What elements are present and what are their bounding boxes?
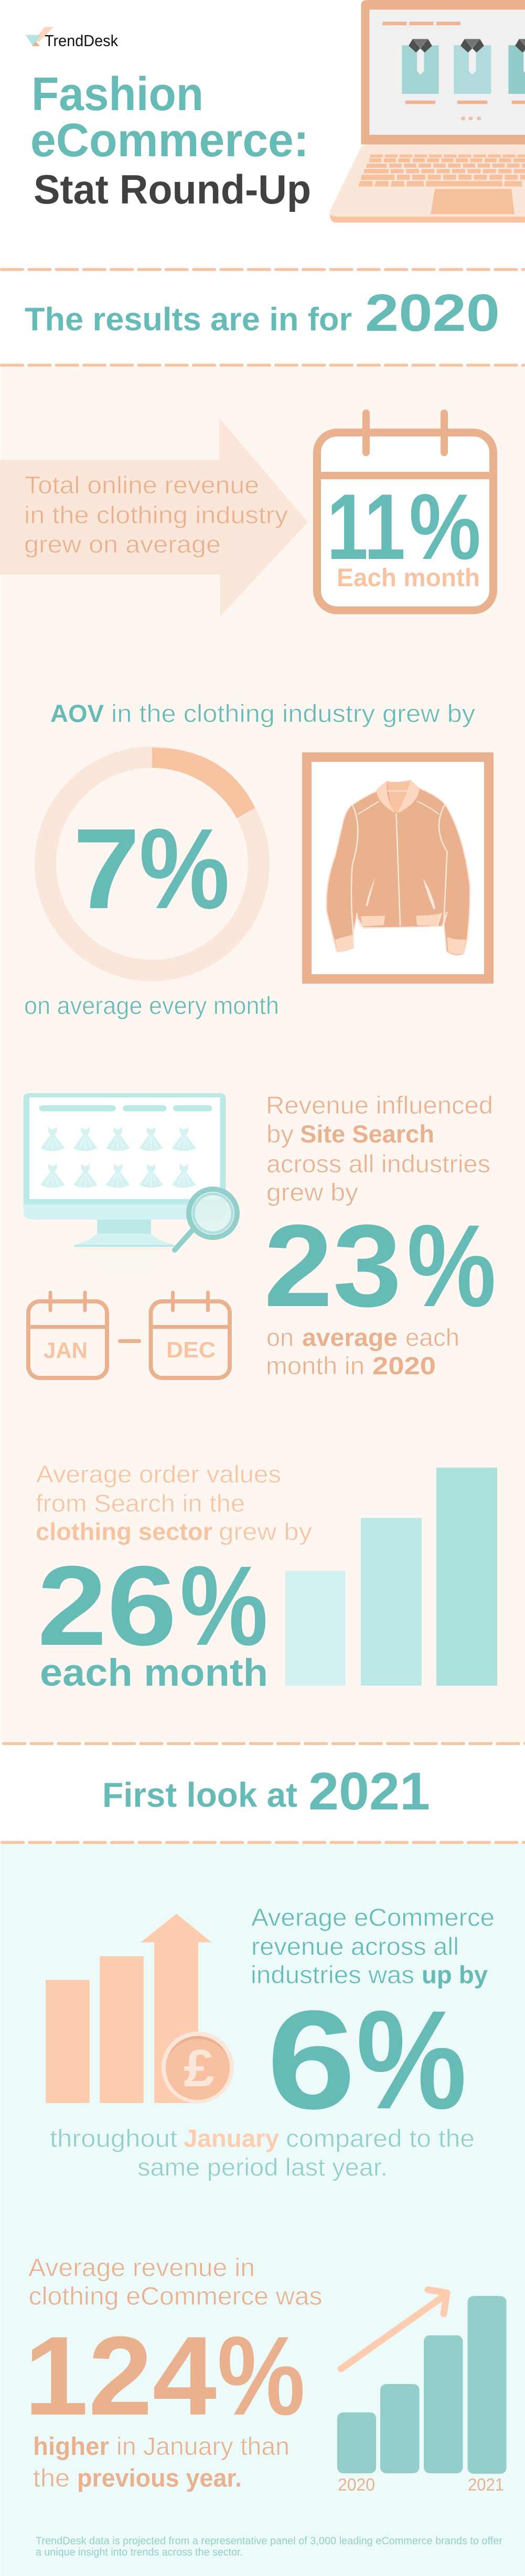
calendar: December bbox=[149, 1292, 232, 1378]
divider bbox=[1, 364, 525, 367]
caption: compared to the bbox=[286, 2125, 475, 2152]
caption: previous year. bbox=[77, 2464, 242, 2493]
stat number bbox=[264, 1201, 496, 1331]
caption: 2020 bbox=[372, 1352, 436, 1379]
caption: on average every month bbox=[24, 991, 279, 1019]
heading: results for 2020: 2020 bbox=[365, 284, 500, 342]
text block: clothing eCommerce was bbox=[28, 2283, 322, 2310]
stat number: % bbox=[139, 805, 230, 933]
axis label: 2020: 2020 bbox=[338, 2475, 375, 2494]
panel: 2020 results background bbox=[1, 366, 525, 1743]
dash between calendars bbox=[118, 1339, 141, 1343]
caption: average bbox=[302, 1323, 398, 1351]
text block: up by bbox=[422, 1961, 488, 1988]
stat number: % bbox=[409, 475, 481, 579]
text block: Total online revenue bbox=[25, 471, 259, 499]
heading: results for 2020 bbox=[25, 284, 500, 342]
text block: Average order values bbox=[36, 1461, 281, 1488]
panel: site search stat bbox=[24, 1091, 496, 1379]
panel: online revenue stat bbox=[0, 413, 497, 617]
logo wordmark: TrendDesk bbox=[45, 31, 118, 50]
title bbox=[30, 68, 311, 212]
stat number bbox=[73, 805, 230, 933]
icon: calendar with 11% bbox=[313, 413, 497, 610]
text block bbox=[251, 1903, 495, 1988]
heading: first look at 2021: First look at bbox=[102, 1775, 297, 1814]
title: eCommerce: bbox=[30, 114, 309, 167]
heading: AOV bbox=[50, 699, 104, 727]
text block: grew on average bbox=[24, 531, 221, 558]
caption: the bbox=[33, 2464, 70, 2493]
bar chart: 2020 to 2021 bbox=[337, 2290, 507, 2494]
text block: from Search in the bbox=[36, 1490, 245, 1517]
stat number: % bbox=[180, 1542, 268, 1669]
stat number: 6 bbox=[267, 1981, 356, 2138]
logo mark bbox=[26, 27, 53, 46]
stat number: 23 bbox=[264, 1201, 402, 1331]
caption: each bbox=[405, 1323, 459, 1351]
text block bbox=[28, 2254, 322, 2310]
title: Fashion bbox=[31, 68, 203, 121]
stat caption: each month bbox=[40, 1652, 268, 1694]
divider bbox=[3, 1742, 525, 1745]
arrow bbox=[341, 2290, 447, 2369]
heading: first look at 2021 bbox=[102, 1762, 430, 1821]
stat number bbox=[24, 2313, 305, 2439]
text block: Average revenue in bbox=[28, 2254, 255, 2282]
icon: monitor with dresses and magnifier bbox=[24, 1093, 237, 1290]
arrow bbox=[0, 418, 308, 617]
logo bbox=[26, 27, 118, 50]
heading: results for 2020: The results are in for bbox=[25, 301, 352, 338]
bar chart bbox=[285, 1468, 497, 1686]
text block: Site Search bbox=[300, 1120, 434, 1148]
caption: January bbox=[184, 2125, 279, 2152]
stat number: 124 bbox=[24, 2313, 217, 2439]
icon: framed jacket bbox=[307, 757, 489, 979]
text block: revenue across all bbox=[251, 1933, 459, 1960]
text block: Average eCommerce bbox=[251, 1903, 495, 1931]
text block bbox=[24, 471, 288, 558]
caption: higher bbox=[33, 2433, 109, 2461]
panel: AOV stat bbox=[24, 699, 489, 1019]
stat number: % bbox=[217, 2313, 305, 2439]
text block: grew by bbox=[219, 1518, 312, 1545]
caption: in January than bbox=[116, 2433, 290, 2461]
stat number: % bbox=[407, 1201, 496, 1331]
text block: grew by bbox=[266, 1178, 359, 1206]
stat number bbox=[37, 1542, 268, 1669]
calendar: January bbox=[26, 1292, 109, 1378]
stat number: % bbox=[356, 1981, 467, 2138]
divider bbox=[2, 1841, 525, 1844]
title: Stat Round-Up bbox=[34, 166, 311, 212]
icon: bars with arrow and pound coin bbox=[46, 1914, 234, 2104]
heading: first look at 2021: 2021 bbox=[308, 1762, 430, 1821]
icon: Jan to Dec calendars bbox=[26, 1292, 232, 1378]
icon: pound coin: £ bbox=[184, 2039, 215, 2098]
text block bbox=[36, 1461, 312, 1545]
panel: eCommerce revenue stat bbox=[46, 1903, 495, 2181]
stat number bbox=[327, 475, 481, 579]
text block: clothing sector bbox=[36, 1518, 212, 1545]
caption bbox=[33, 2433, 290, 2493]
panel: 2021 background bbox=[1, 1844, 525, 2576]
stat number: 11 bbox=[327, 475, 405, 579]
panel: clothing revenue stat bbox=[24, 2254, 507, 2494]
panel: search order value stat bbox=[36, 1461, 497, 1694]
text block: across all industries bbox=[266, 1150, 490, 1178]
stat number bbox=[267, 1981, 467, 2138]
caption: month in bbox=[266, 1352, 365, 1379]
calendar: December: DEC bbox=[166, 1338, 216, 1363]
text block bbox=[266, 1091, 493, 1206]
footnote: a unique insight into trends across the sector. bbox=[36, 2547, 243, 2558]
caption: on bbox=[266, 1323, 294, 1351]
stat caption: Each month bbox=[337, 564, 480, 592]
stat number: 7 bbox=[73, 805, 140, 933]
caption: throughout bbox=[50, 2125, 177, 2152]
icon: laptop with shirt shop bbox=[330, 0, 525, 223]
panel: 2020 heading band bbox=[1, 270, 525, 342]
axis label: 2021: 2021 bbox=[468, 2475, 504, 2494]
calendar: January: JAN bbox=[44, 1338, 88, 1363]
divider bbox=[1, 268, 525, 271]
panel: header bbox=[26, 0, 525, 223]
text block: industries was bbox=[251, 1961, 414, 1988]
icon: pound coin bbox=[162, 2031, 234, 2104]
caption: same period last year. bbox=[137, 2153, 388, 2181]
heading: in the clothing industry grew by bbox=[111, 699, 476, 727]
footnote bbox=[36, 2536, 502, 2558]
footnote: TrendDesk data is projected from a representative panel of 3,000 leading eCommerce brands to offer bbox=[36, 2536, 502, 2547]
caption bbox=[50, 2125, 475, 2181]
text block: Revenue influenced bbox=[266, 1091, 493, 1119]
text block: by bbox=[266, 1120, 294, 1148]
text block: in the clothing industry bbox=[24, 501, 288, 529]
stat number: 26 bbox=[37, 1542, 177, 1669]
donut chart bbox=[45, 748, 259, 971]
caption bbox=[266, 1323, 459, 1379]
